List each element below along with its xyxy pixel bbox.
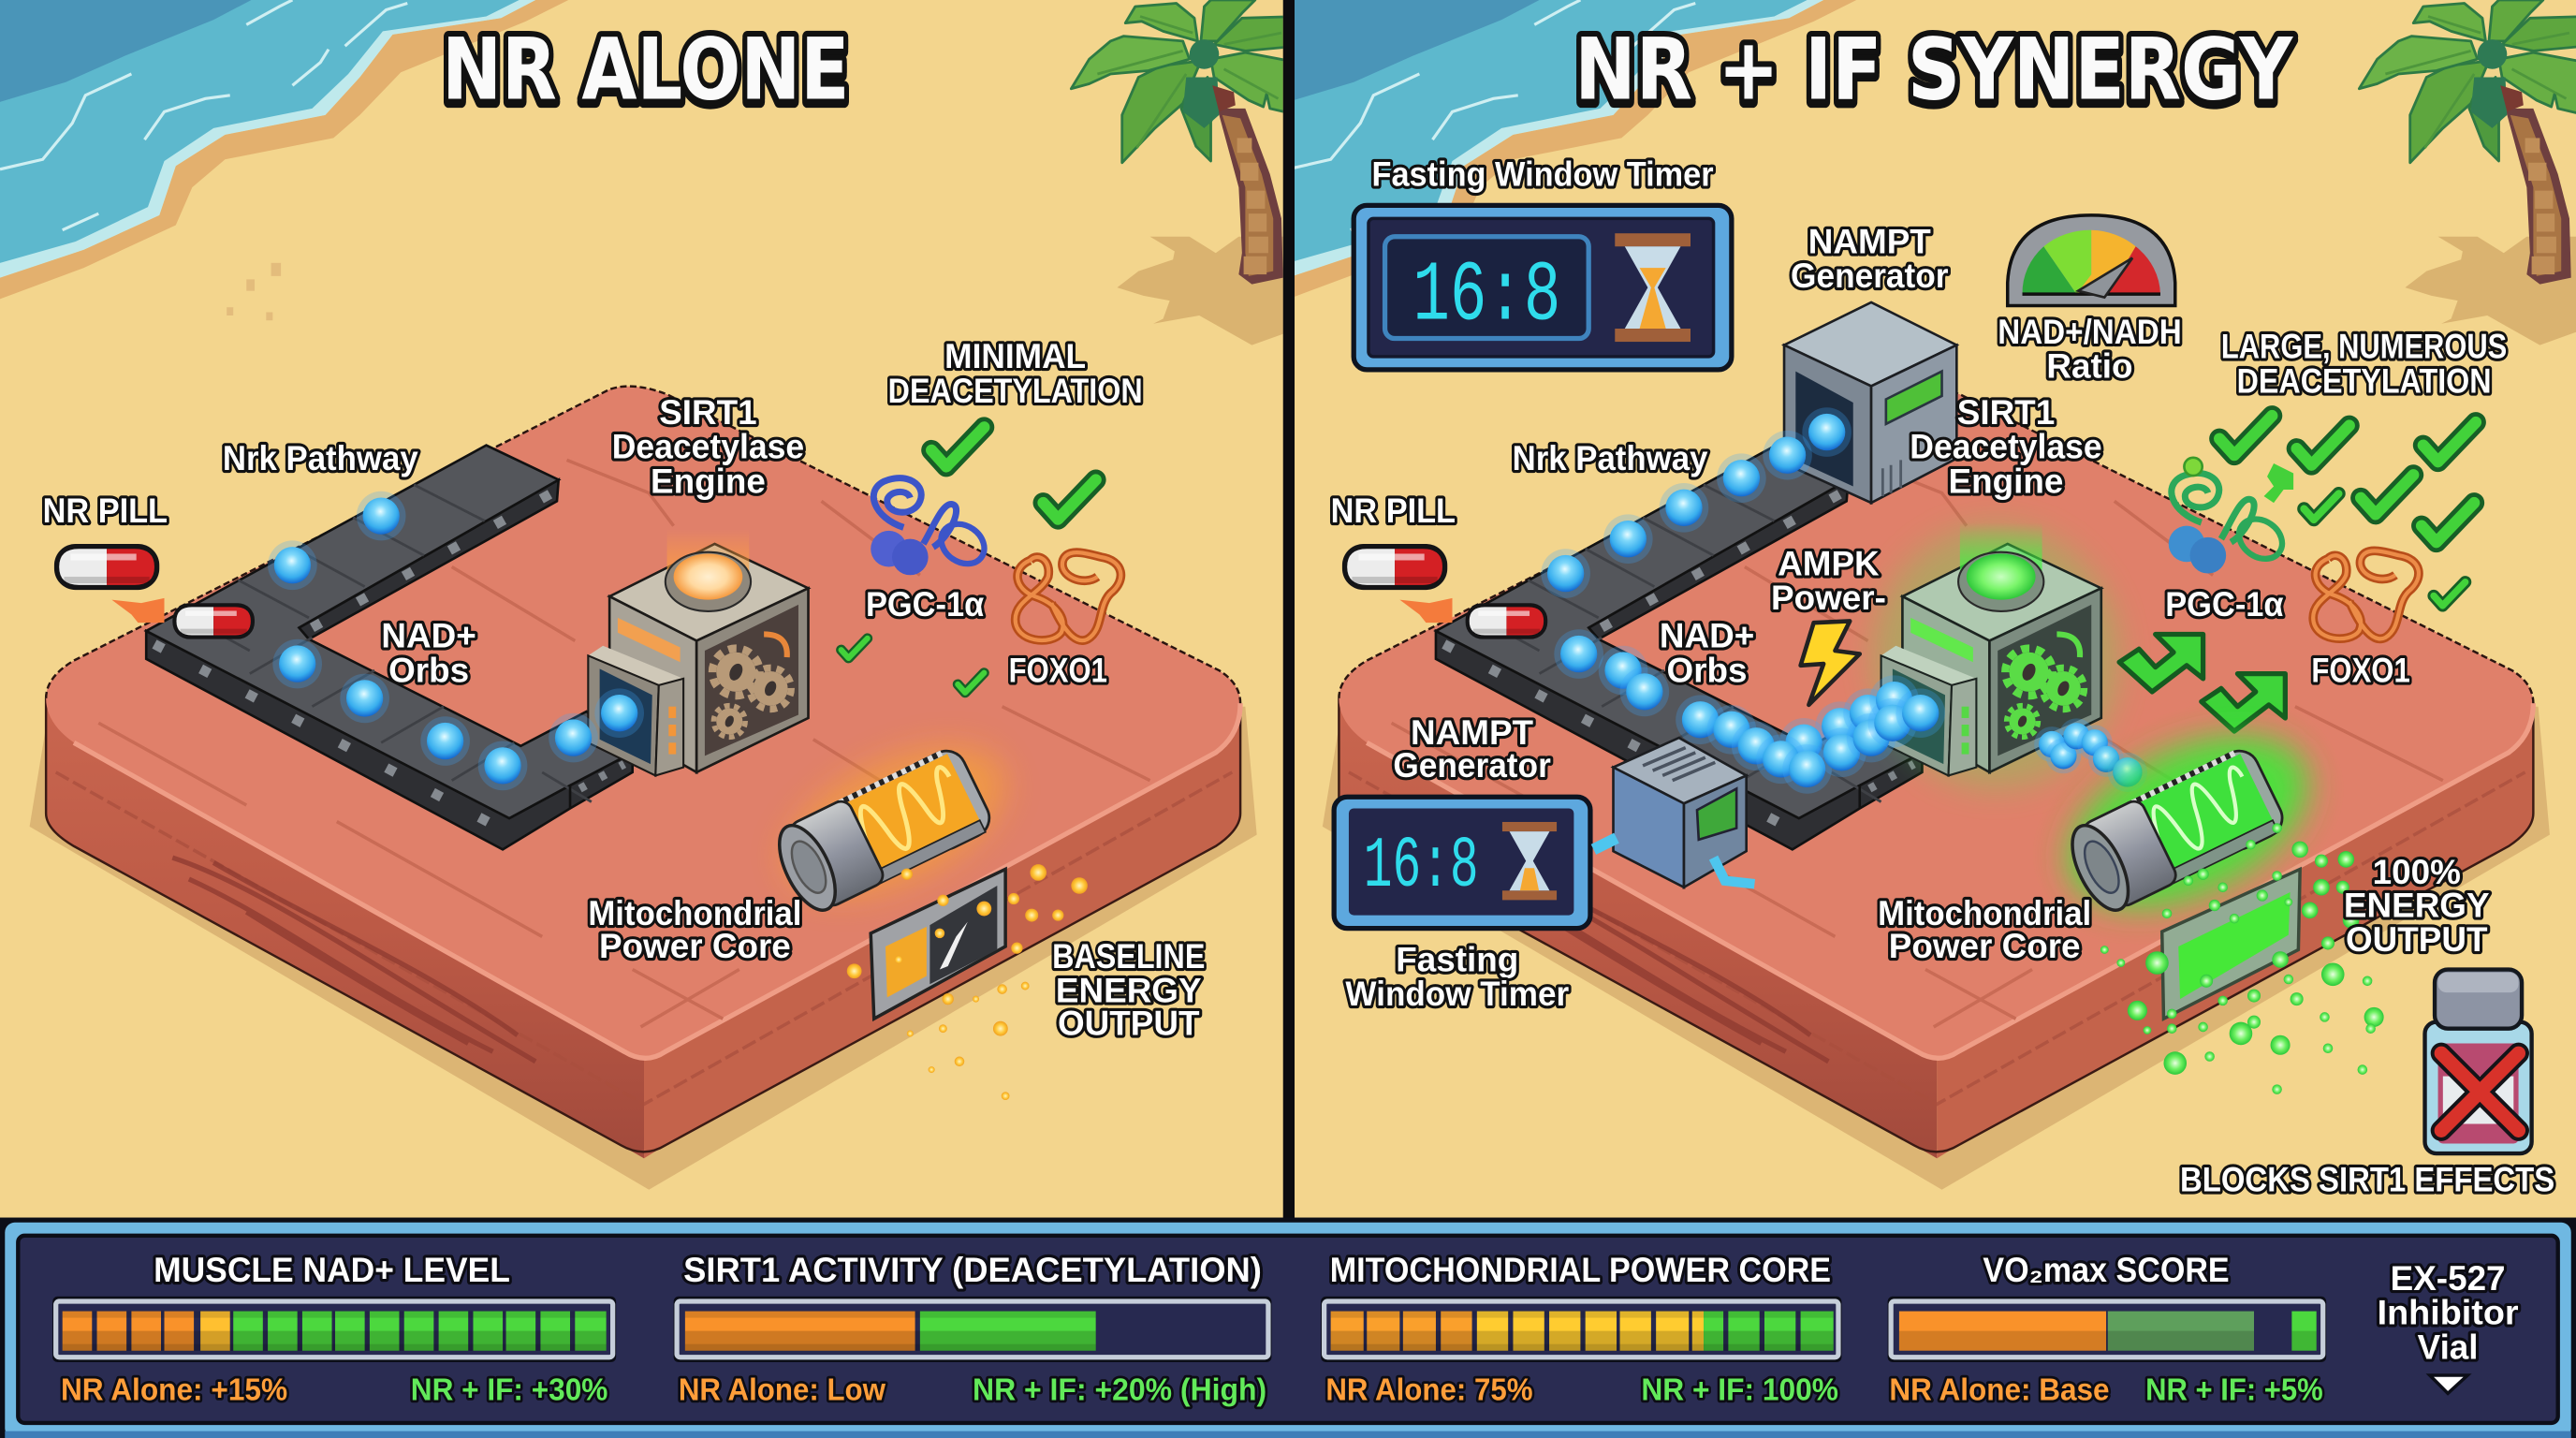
- beach scene: [1288, 0, 2576, 345]
- stat: VO2max score: [1889, 1251, 2324, 1407]
- label: 100% energy output: OUTPUT: [2346, 920, 2488, 959]
- stat: SIRT1 activity: NR + IF: +20% (High): [973, 1372, 1266, 1407]
- NAD+ orbs: [1541, 407, 1945, 794]
- label: NAMPT generator (lower): Generator: [1393, 746, 1551, 785]
- stat: muscle NAD+ level: NR Alone: +15%: [61, 1372, 287, 1407]
- icon: FOXO1 protein: [1016, 552, 1120, 640]
- label: 100% energy output: ENERGY: [2344, 886, 2490, 924]
- label: baseline energy output: [1052, 937, 1205, 1043]
- arrow: pill to belt: [1399, 598, 1453, 623]
- label: NAD+/NADH ratio: Ratio: [2046, 347, 2133, 386]
- NAD+ orbs: [268, 492, 644, 790]
- conveyor belt: Nrk pathway: [1436, 446, 1922, 849]
- icon: hourglass: [1615, 233, 1690, 342]
- NAMPT generator (small): [1593, 738, 1754, 888]
- icon: FOXO1 protein: [2313, 550, 2419, 638]
- energy output meter (full): [2162, 869, 2300, 1019]
- label: fasting window timer (lower): Fasting: [1396, 940, 1518, 978]
- label: FOXO1: FOXO1: [2311, 651, 2410, 689]
- NAD+/NADH gauge: [2008, 215, 2175, 305]
- label: large numerous deacetylation: DEACETYLATION: [2237, 361, 2492, 400]
- label: NAD+ orbs: [1660, 617, 1754, 689]
- orb stream to power core: [2034, 718, 2147, 792]
- energy sparks: [847, 864, 1088, 1100]
- label: SIRT1 engine: SIRT1: [1957, 393, 2055, 432]
- label: SIRT1 engine: Engine: [1949, 462, 2063, 501]
- isometric platform: [30, 387, 1257, 1190]
- isometric platform: [1323, 387, 2550, 1190]
- label: EX-527 inhibitor vial: EX-527: [2391, 1259, 2506, 1298]
- label: PGC-1a: PGC-1α: [2165, 585, 2284, 624]
- stat: muscle NAD+ level: NR + IF: +30%: [411, 1372, 607, 1407]
- label: baseline energy output: BASELINE: [1052, 937, 1205, 976]
- label: mitochondrial power core: Mitochondrial: [1878, 894, 2091, 932]
- green up arrows: [2119, 634, 2285, 731]
- fasting window timer (bottom): [1334, 797, 1590, 929]
- arrow: pill to belt: [111, 598, 165, 623]
- title: NR + IF SYNERGY: NR + IF SYNERGY: [1574, 19, 2293, 119]
- label: Nrk pathway: Nrk Pathway: [1513, 439, 1708, 477]
- stat: VO2max score: NR Alone: Base: [1889, 1372, 2110, 1407]
- label: NAMPT generator (lower): [1393, 713, 1551, 785]
- label: large numerous deacetylation: [2221, 328, 2507, 400]
- label: minimal deacetylation: MINIMAL: [944, 337, 1086, 375]
- deacetylation checks: [2219, 416, 2476, 606]
- label: EX-527 inhibitor vial: [2378, 1259, 2519, 1393]
- bar: SIRT1: [675, 1299, 1270, 1360]
- bar: muscle NAD+: [54, 1299, 614, 1360]
- SIRT1 engine (active): [1873, 522, 2119, 788]
- stat: SIRT1 activity: [675, 1251, 1270, 1407]
- icon: PGC-1a protein: [2169, 458, 2293, 574]
- panel: NR alone: [0, 0, 1298, 1190]
- icon: hourglass: [1502, 822, 1557, 900]
- conveyor belt: Nrk pathway: [146, 446, 633, 849]
- label: EX-527 inhibitor vial: Vial: [2418, 1328, 2479, 1366]
- label: NAD+ orbs: NAD+: [381, 617, 476, 655]
- stat: muscle NAD+ level: MUSCLE NAD+ LEVEL: [154, 1251, 510, 1289]
- stat: SIRT1 activity: SIRT1 ACTIVITY (DEACETYLATION): [683, 1251, 1262, 1289]
- label: AMPK power: [1771, 544, 1886, 617]
- label: SIRT1 engine: Deacetylase: [1910, 428, 2102, 466]
- stat: muscle NAD+ level: [54, 1251, 614, 1407]
- beach scene: [0, 0, 1298, 345]
- icon: down arrow: [2430, 1375, 2467, 1393]
- label: SIRT1 engine: Deacetylase: [612, 428, 804, 466]
- label: NAD+ orbs: Orbs: [388, 651, 469, 689]
- icon: EX-527 inhibitor vial: [2425, 970, 2532, 1153]
- label: mitochondrial power core: Mitochondrial: [588, 894, 801, 932]
- icon: AMPK lightning bolt: [1801, 621, 1860, 705]
- label: baseline energy output: OUTPUT: [1058, 1005, 1200, 1043]
- label: 100% energy output: 100%: [2373, 853, 2461, 891]
- label: Nrk pathway: Nrk Pathway: [223, 439, 418, 477]
- label: minimal deacetylation: [887, 341, 1144, 406]
- doorway: [588, 646, 683, 685]
- label: mitochondrial power core: [1878, 894, 2091, 965]
- label: fasting window timer (lower): Window Timer: [1345, 975, 1569, 1013]
- energy particles: [2100, 823, 2384, 1094]
- label: fasting window timer (lower): [1345, 940, 1569, 1013]
- label: AMPK power: Power-: [1771, 579, 1886, 617]
- label: mitochondrial power core: [588, 894, 801, 965]
- divider between panels: [1283, 0, 1295, 1225]
- label: PGC-1a: PGC-1α: [866, 585, 985, 624]
- label: SIRT1 engine: SIRT1: [659, 393, 757, 432]
- energy output meter: [871, 869, 1005, 1019]
- label: 100% energy output: [2344, 853, 2490, 959]
- label: minimal deacetylation: DEACETYLATION: [888, 372, 1143, 410]
- stat: SIRT1 activity: NR Alone: Low: [679, 1372, 886, 1407]
- stat: mitochondrial power core: [1323, 1251, 1840, 1407]
- fasting window timer (bottom): 16:8: [1364, 827, 1479, 908]
- label: mitochondrial power core: Power Core: [1889, 927, 2081, 965]
- bar: VO2max: [1889, 1299, 2324, 1360]
- label: SIRT1 engine: [612, 393, 804, 501]
- fasting window timer (top): [1354, 205, 1732, 370]
- stats panel: [0, 1218, 2576, 1438]
- label: NAD+/NADH ratio: NAD+/NADH: [1998, 313, 2182, 351]
- stats panel frame: [0, 1218, 2576, 1438]
- label: mitochondrial power core: Power Core: [599, 927, 791, 965]
- label: NAD+ orbs: [381, 617, 476, 689]
- panel: NR + IF synergy: [1288, 0, 2576, 1198]
- label: NAMPT generator: NAMPT: [1808, 222, 1931, 260]
- label: SIRT1 engine: [1910, 393, 2102, 501]
- title: NR ALONE: NR ALONE: [442, 19, 849, 119]
- label: NAMPT generator (lower): NAMPT: [1411, 713, 1534, 752]
- label: NAMPT generator: [1791, 222, 1949, 295]
- NAMPT generator (large): [1784, 302, 1956, 503]
- bar: power core: [1323, 1299, 1840, 1360]
- label: NAD+ orbs: NAD+: [1660, 617, 1754, 655]
- label: NAD+/NADH ratio: [1998, 313, 2182, 386]
- label: EX-527 inhibitor vial: Inhibitor: [2378, 1294, 2519, 1332]
- SIRT1 engine: [588, 529, 809, 775]
- label: large numerous deacetylation: LARGE, NUMEROUS: [2221, 328, 2507, 366]
- label: NAD+ orbs: Orbs: [1667, 651, 1748, 689]
- label: fasting window timer: Fasting Window Timer: [1372, 154, 1714, 193]
- stat: mitochondrial power core: NR + IF: 100%: [1641, 1372, 1838, 1407]
- stat: VO2max score: VO₂max SCORE: [1983, 1251, 2230, 1289]
- icon: pill on belt: [1466, 603, 1547, 639]
- label: SIRT1 engine: Engine: [651, 462, 766, 501]
- icon: NR pill: [1342, 544, 1447, 590]
- label: AMPK power: AMPK: [1778, 544, 1880, 582]
- mitochondrial power core battery (charged): [2042, 700, 2335, 943]
- fasting window timer (top): 16:8: [1412, 248, 1560, 345]
- stat: mitochondrial power core: NR Alone: 75%: [1325, 1372, 1533, 1407]
- icon: NR pill: [54, 544, 159, 590]
- label: NR pill: NR PILL: [43, 492, 168, 530]
- icon: pill on belt: [172, 603, 255, 639]
- stat: VO2max score: NR + IF: +5%: [2145, 1372, 2323, 1407]
- deacetylation checks: [842, 427, 1096, 693]
- label: FOXO1: FOXO1: [1009, 651, 1107, 689]
- label: NAMPT generator: Generator: [1791, 257, 1949, 295]
- stat: mitochondrial power core: MITOCHONDRIAL POWER CORE: [1330, 1251, 1831, 1289]
- label: NR pill: NR PILL: [1331, 492, 1456, 530]
- label: baseline energy output: ENERGY: [1056, 972, 1202, 1010]
- icon: PGC-1a protein: [871, 478, 992, 575]
- mitochondrial power core battery: [777, 737, 1014, 912]
